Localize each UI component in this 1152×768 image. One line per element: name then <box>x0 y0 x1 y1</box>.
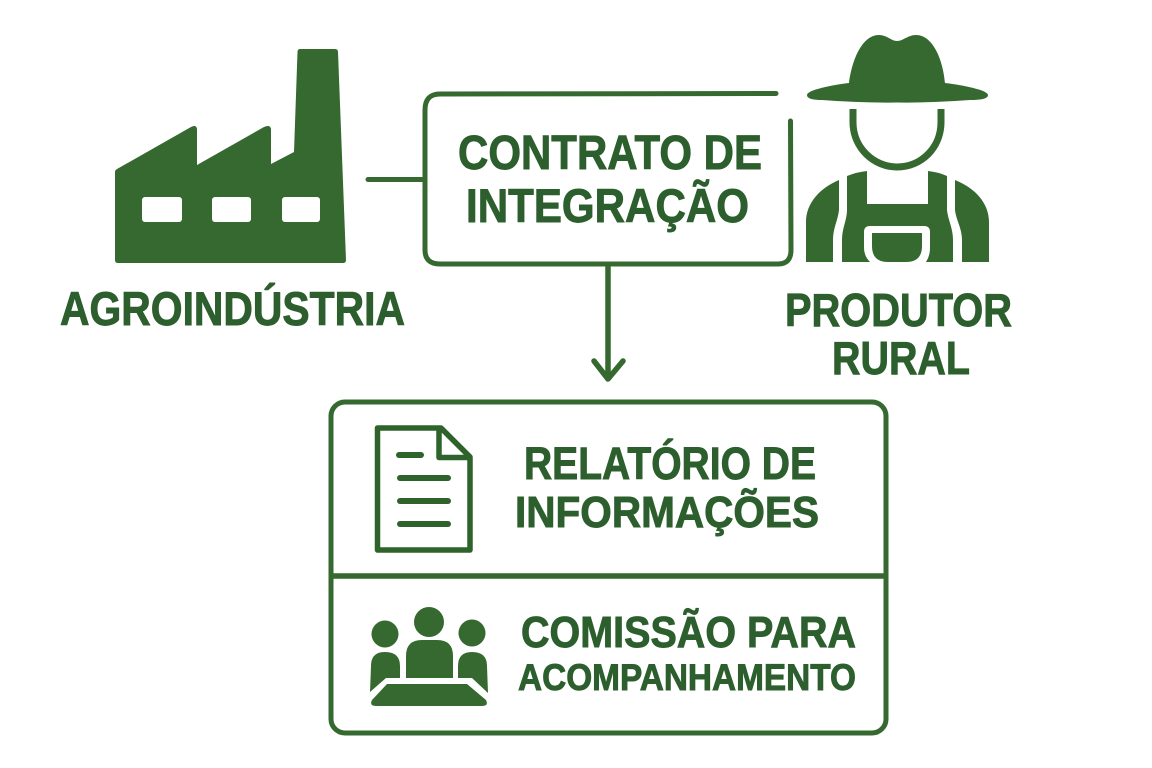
farmer face <box>853 109 941 167</box>
farmer overalls <box>842 171 953 262</box>
panel: contrato de integração <box>425 94 791 264</box>
label: produtor rural: PRODUTOR <box>785 284 1012 336</box>
farmer left sleeve <box>806 180 839 262</box>
report heading <box>515 438 819 537</box>
contract heading: INTEGRAÇÃO <box>466 179 749 232</box>
contract heading: CONTRATO DE <box>458 127 762 180</box>
farmer right sleeve <box>955 180 989 262</box>
contract heading <box>458 127 762 232</box>
label: produtor rural <box>785 284 1012 384</box>
report heading: RELATÓRIO DE <box>524 438 816 489</box>
icon: document <box>378 428 470 550</box>
farmer hat <box>807 35 988 103</box>
icon: factory <box>115 49 346 263</box>
farmer pocket <box>872 233 922 262</box>
icon: committee meeting <box>370 607 488 706</box>
label: agroindústria: AGROINDÚSTRIA <box>60 282 405 335</box>
report heading: INFORMAÇÕES <box>515 487 819 537</box>
icon: farmer <box>806 35 989 262</box>
contract box outline <box>425 94 791 264</box>
committee heading <box>518 607 856 698</box>
committee heading: ACOMPANHAMENTO <box>518 657 856 698</box>
arrow: contract to report panel <box>594 265 623 379</box>
panel: relatório e comissão <box>331 402 886 733</box>
lower box outline <box>331 402 886 733</box>
committee heading: COMISSÃO PARA <box>521 607 856 657</box>
connector: factory to contract <box>368 177 425 182</box>
label: produtor rural: RURAL <box>832 332 970 384</box>
